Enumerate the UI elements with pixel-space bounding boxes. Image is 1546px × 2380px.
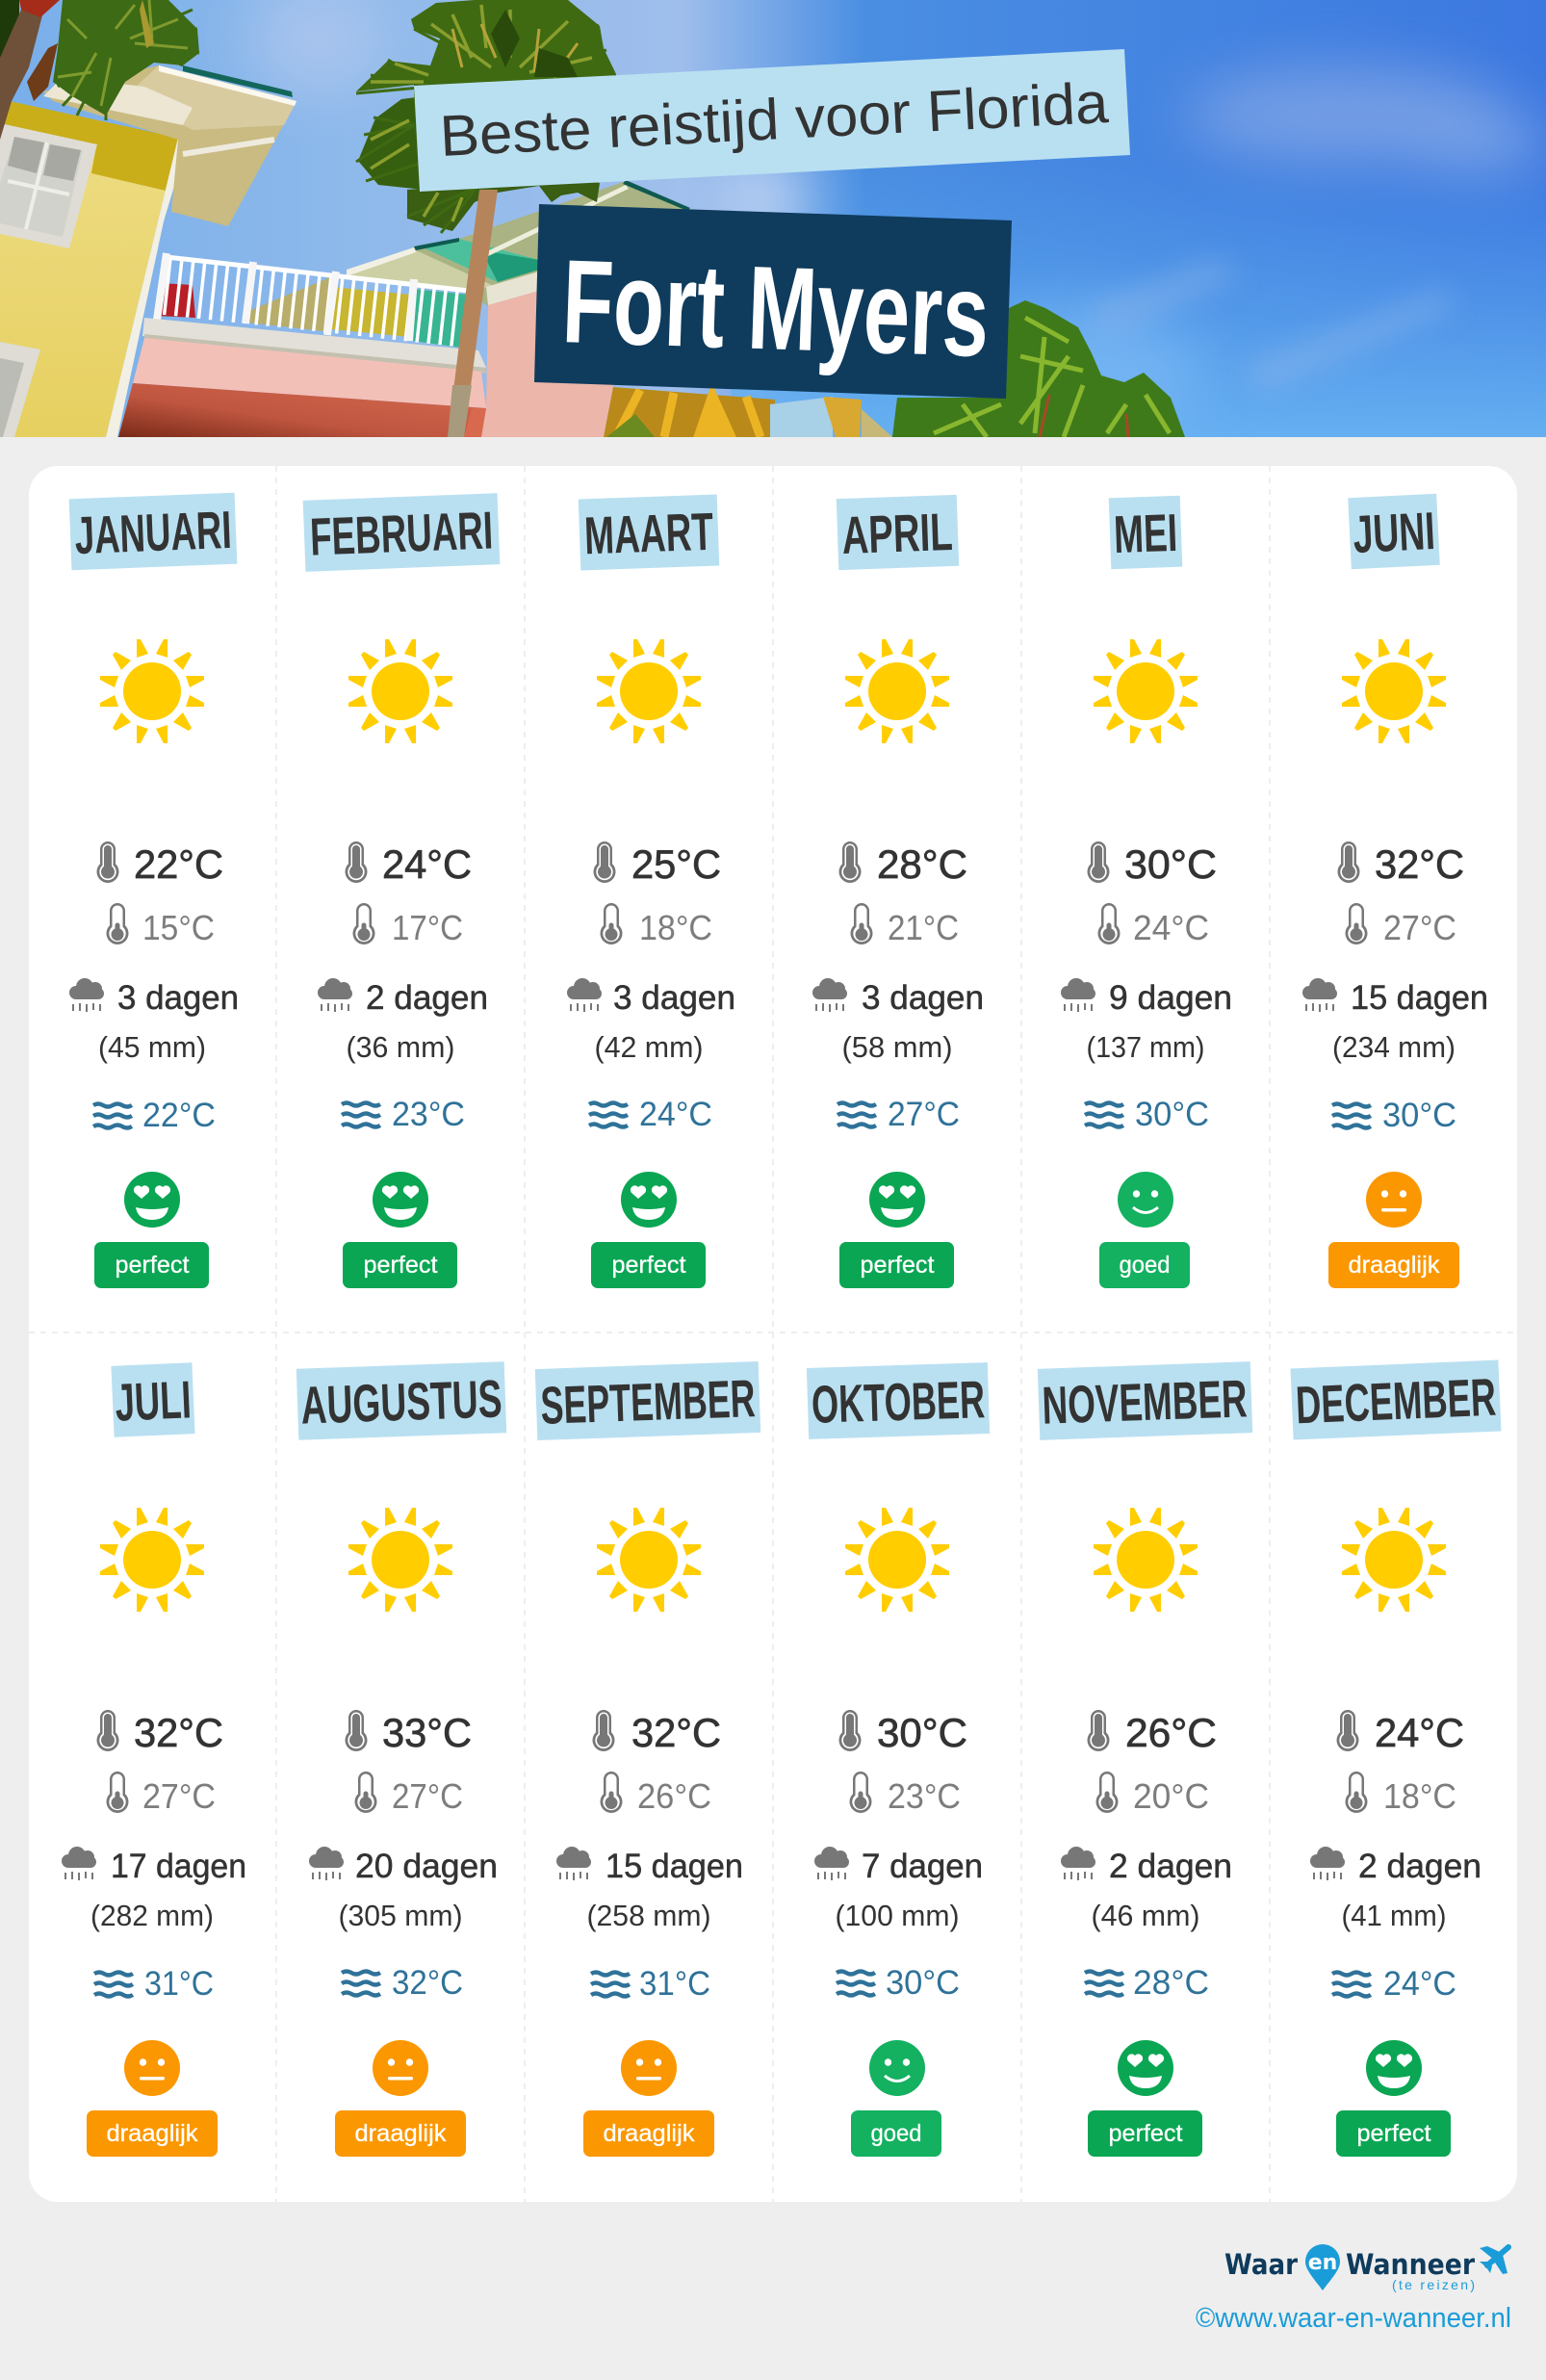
rain days: 15 dagen: [1351, 979, 1488, 1017]
heading juni: JUNI: [1352, 501, 1436, 564]
rain days: [812, 978, 984, 1017]
heading mei: MEI: [1113, 503, 1178, 564]
min temperature: 20°C: [1133, 1776, 1209, 1816]
icon: sun: [348, 639, 452, 743]
rating badge: [1336, 2110, 1451, 2157]
rating badge: [851, 2110, 941, 2157]
water temperature: [342, 1964, 463, 2002]
rain days: 2 dagen: [366, 979, 488, 1017]
title banner: Fort Myers: [560, 236, 991, 382]
max temperature: 32°C: [1375, 841, 1464, 887]
max temperature: 32°C: [134, 1710, 223, 1755]
max temperature: [593, 1710, 721, 1755]
month: januari: [69, 493, 239, 1288]
heading mei: [1109, 496, 1182, 569]
water temperature: 24°C: [1383, 1965, 1456, 2003]
heading november: NOVEMBER: [1042, 1368, 1249, 1436]
month: oktober: [807, 1362, 990, 2157]
rain days: 2 dagen: [1109, 1848, 1232, 1885]
water temperature: [1332, 1097, 1456, 1134]
icon: perfect smiley: [869, 1172, 925, 1228]
min temperature: 18°C: [1383, 1776, 1456, 1816]
month: november: [1038, 1361, 1252, 2157]
rainfall: (42 mm): [595, 1030, 703, 1064]
logo: Waar en Wanneer: Waar: [1224, 2248, 1299, 2281]
month: juli: [62, 1362, 246, 2157]
rating badge: perfect: [116, 1252, 190, 1279]
heading oktober: [807, 1362, 990, 1439]
water temperature: [94, 1965, 214, 2003]
rating badge: perfect: [861, 1252, 935, 1279]
water temperature: [1332, 1965, 1456, 2003]
heading september: [535, 1361, 760, 1440]
rain days: [62, 1847, 246, 1885]
rain days: [318, 978, 488, 1017]
website credit: ©www.waar-en-wanneer.nl: [1196, 2303, 1511, 2334]
rainfall: (282 mm): [90, 1899, 214, 1932]
rating badge: [94, 1242, 209, 1288]
heading maart: MAART: [583, 502, 714, 565]
rainfall: (258 mm): [587, 1899, 710, 1932]
subtitle banner: Beste reistijd voor Florida: [438, 70, 1110, 168]
icon: location pin: [1305, 2244, 1340, 2290]
max temperature: 32°C: [631, 1710, 721, 1755]
rainfall: (41 mm): [1342, 1899, 1446, 1932]
rating badge: [87, 2110, 218, 2157]
icon: goed smiley: [1118, 1172, 1173, 1228]
max temperature: 25°C: [631, 841, 721, 887]
heading maart: [579, 495, 719, 570]
rain days: 2 dagen: [1358, 1848, 1482, 1885]
rating badge: draaglijk: [106, 2120, 198, 2147]
icon: sun: [597, 639, 701, 743]
icon: draaglijk smiley: [373, 2040, 428, 2096]
rating badge: [1088, 2110, 1202, 2157]
rating badge: perfect: [1357, 2120, 1431, 2147]
heading februari: FEBRUARI: [309, 500, 494, 567]
icon: sun: [1342, 1508, 1446, 1612]
rain days: 3 dagen: [117, 979, 239, 1017]
heading februari: [303, 493, 500, 572]
water temperature: [342, 1096, 465, 1133]
heading januari: JANUARI: [73, 500, 233, 565]
icon: sun: [348, 1508, 452, 1612]
water temperature: 31°C: [144, 1965, 214, 2003]
title banner: [534, 204, 1012, 399]
rating badge: perfect: [612, 1252, 686, 1279]
max temperature: [593, 841, 721, 887]
icon: sun: [845, 639, 949, 743]
icon: sun: [1094, 1508, 1198, 1612]
icon: draaglijk smiley: [621, 2040, 677, 2096]
min temperature: 21°C: [888, 908, 959, 947]
header photo: Fort Myers buildings and palms: [0, 0, 1546, 443]
min temperature: 15°C: [142, 908, 215, 947]
min temperature: [106, 903, 215, 947]
heading november: [1038, 1361, 1252, 1440]
min temperature: [1346, 903, 1456, 947]
min temperature: [601, 903, 712, 947]
heading augustus: [296, 1361, 506, 1440]
icon: perfect smiley: [621, 1172, 677, 1228]
heading september: SEPTEMBER: [540, 1368, 757, 1436]
rating badge: perfect: [1109, 2120, 1183, 2147]
icon: sun: [1094, 639, 1198, 743]
max temperature: 22°C: [134, 841, 223, 887]
water temperature: [837, 1964, 960, 2002]
rainfall: (58 mm): [841, 1030, 953, 1064]
max temperature: 24°C: [382, 841, 472, 887]
rain days: [1061, 1847, 1232, 1885]
min temperature: 27°C: [392, 1776, 463, 1816]
min temperature: 27°C: [1383, 908, 1456, 947]
max temperature: 33°C: [382, 1710, 472, 1755]
rain days: [814, 1847, 983, 1885]
icon: sun: [1342, 639, 1446, 743]
max temperature: 30°C: [1124, 841, 1217, 887]
min temperature: [1346, 1772, 1456, 1816]
icon: perfect smiley: [1366, 2040, 1422, 2096]
heading april: [837, 495, 959, 570]
month: maart: [567, 495, 735, 1288]
water temperature: [93, 1097, 216, 1134]
month: mei: [1061, 496, 1232, 1288]
max temperature: 24°C: [1375, 1710, 1464, 1755]
month: juni: [1302, 494, 1488, 1288]
rain days: [1061, 978, 1232, 1017]
subtitle banner: [414, 49, 1130, 192]
min temperature: 18°C: [639, 908, 712, 947]
water temperature: [837, 1096, 960, 1133]
icon: sun: [100, 639, 204, 743]
rating badge: [583, 2110, 714, 2157]
water temperature: [1085, 1096, 1209, 1133]
water temperature: 27°C: [888, 1096, 960, 1133]
water temperature: 31°C: [639, 1965, 710, 2003]
rating badge: [839, 1242, 954, 1288]
min temperature: [601, 1772, 711, 1816]
rating badge: [335, 2110, 466, 2157]
icon: perfect smiley: [124, 1172, 180, 1228]
rating badge: goed: [1119, 1252, 1171, 1279]
rating badge: draaglijk: [354, 2120, 447, 2147]
rating badge: [1099, 1242, 1190, 1288]
heading januari: [69, 493, 237, 570]
min temperature: 23°C: [888, 1776, 961, 1816]
rating badge: draaglijk: [603, 2120, 695, 2147]
water temperature: 22°C: [142, 1097, 216, 1134]
water temperature: 30°C: [886, 1964, 960, 2002]
min temperature: [352, 903, 463, 947]
max temperature: [1336, 1710, 1464, 1755]
water temperature: [589, 1096, 712, 1133]
water temperature: 24°C: [639, 1096, 712, 1133]
month: december: [1291, 1360, 1501, 2157]
max temperature: [1088, 1710, 1217, 1755]
rainfall: (36 mm): [347, 1030, 454, 1064]
water temperature: [591, 1965, 710, 2003]
heading augustus: AUGUSTUS: [300, 1368, 503, 1436]
water temperature: 30°C: [1382, 1097, 1456, 1134]
month: februari: [303, 493, 500, 1288]
rating badge: [591, 1242, 706, 1288]
rain days: 20 dagen: [355, 1848, 498, 1885]
heading juni: [1348, 494, 1440, 569]
min temperature: [849, 1772, 961, 1816]
icon: draaglijk smiley: [1366, 1172, 1422, 1228]
min temperature: [106, 1772, 216, 1816]
max temperature: [1088, 841, 1217, 887]
rainfall: (45 mm): [98, 1030, 206, 1064]
min temperature: [851, 903, 959, 947]
logo: Waar en Wanneer: [1224, 2244, 1508, 2292]
rain days: 17 dagen: [111, 1848, 246, 1885]
rainfall: (100 mm): [836, 1899, 959, 1932]
rainfall: (305 mm): [339, 1899, 462, 1932]
rain days: [1310, 1847, 1482, 1885]
rain days: 7 dagen: [862, 1848, 983, 1885]
rain days: 3 dagen: [613, 979, 735, 1017]
min temperature: 17°C: [392, 908, 463, 947]
rainfall: (46 mm): [1092, 1899, 1199, 1932]
rainfall: (234 mm): [1332, 1030, 1456, 1064]
water temperature: 32°C: [392, 1964, 463, 2002]
rating badge: goed: [870, 2120, 922, 2147]
logo: Waar en Wanneer: en: [1308, 2251, 1337, 2275]
water temperature: 30°C: [1135, 1096, 1209, 1133]
rain days: [69, 978, 239, 1017]
heading oktober: OKTOBER: [811, 1369, 986, 1435]
rating badge: draaglijk: [1348, 1252, 1440, 1279]
min temperature: [1095, 1772, 1209, 1816]
month: augustus: [296, 1361, 506, 2157]
water temperature: 23°C: [392, 1096, 465, 1133]
heading april: APRIL: [840, 502, 954, 565]
climate table panel: [29, 466, 1517, 2202]
icon: draaglijk smiley: [124, 2040, 180, 2096]
logo: Waar en Wanneer: (te reizen): [1392, 2277, 1475, 2292]
water temperature: 28°C: [1133, 1964, 1209, 2002]
heading juli: JULI: [114, 1369, 193, 1433]
min temperature: 24°C: [1133, 908, 1209, 947]
water temperature: [1085, 1964, 1209, 2002]
logo: Waar en Wanneer: Wanneer: [1346, 2248, 1476, 2281]
icon: sun: [845, 1508, 949, 1612]
min temperature: [1097, 903, 1209, 947]
rating badge: [343, 1242, 457, 1288]
rain days: 15 dagen: [606, 1848, 743, 1885]
rating badge: perfect: [364, 1252, 438, 1279]
heading juli: [111, 1362, 195, 1437]
rainfall: (137 mm): [1086, 1030, 1205, 1064]
icon: goed smiley: [869, 2040, 925, 2096]
min temperature: [354, 1772, 463, 1816]
month: september: [535, 1361, 760, 2157]
max temperature: 26°C: [1125, 1710, 1217, 1755]
min temperature: 27°C: [142, 1776, 216, 1816]
month: april: [812, 495, 984, 1288]
icon: sun: [100, 1508, 204, 1612]
max temperature: 30°C: [877, 1710, 967, 1755]
rating badge: [1328, 1242, 1459, 1288]
rain days: 9 dagen: [1109, 979, 1232, 1017]
icon: sun: [597, 1508, 701, 1612]
icon: perfect smiley: [1118, 2040, 1173, 2096]
min temperature: 26°C: [637, 1776, 711, 1816]
max temperature: 28°C: [877, 841, 967, 887]
icon: perfect smiley: [373, 1172, 428, 1228]
rain days: 3 dagen: [862, 979, 984, 1017]
icon: airplane: [1480, 2246, 1508, 2274]
